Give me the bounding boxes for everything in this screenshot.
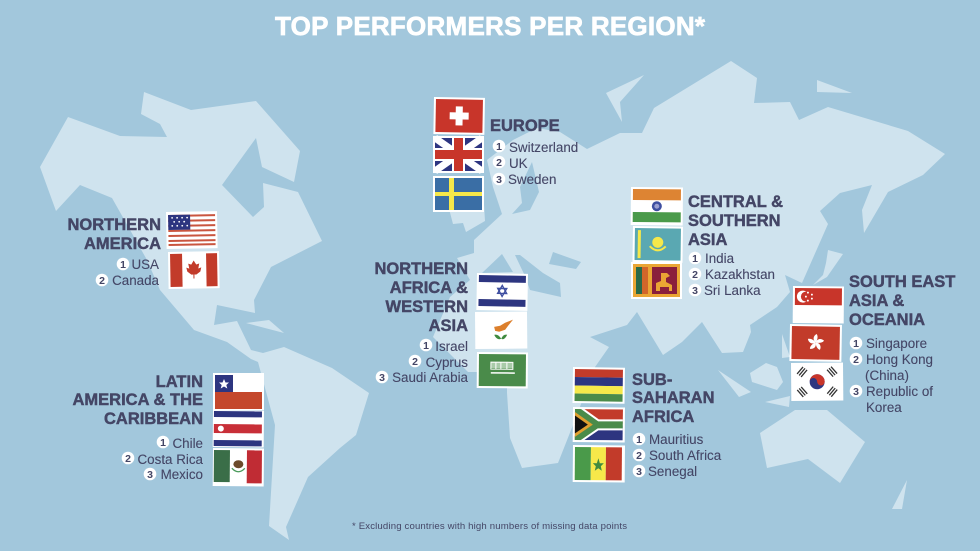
ranked list: Sub-Saharan Africa: Senegal bbox=[648, 464, 697, 479]
ranked list: Sub-Saharan Africa: 3 bbox=[636, 466, 642, 478]
heading: Latin America and the Caribbean: CARIBBEAN bbox=[104, 410, 203, 428]
ranked list: Latin America and the Caribbean: Mexico bbox=[161, 467, 203, 482]
flag: Kazakhstan bbox=[632, 226, 683, 263]
heading: South East Asia and Oceania: SOUTH EAST bbox=[849, 273, 955, 291]
ranked list: Latin America and the Caribbean: 1 bbox=[160, 437, 166, 449]
ranked list: Central and Southern Asia: 2 bbox=[692, 269, 698, 281]
heading: Northern America: AMERICA bbox=[84, 235, 161, 253]
ranked list: Europe: Switzerland bbox=[509, 140, 578, 155]
flag: Mauritius bbox=[572, 367, 625, 404]
ranked list: Latin America and the Caribbean: 3 bbox=[147, 469, 153, 481]
ranked list: Northern Africa and Western Asia: 3 bbox=[379, 372, 385, 384]
panel: South East Asia and Oceania bbox=[789, 273, 955, 415]
ranked list: South East Asia and Oceania: Singapore bbox=[866, 336, 927, 351]
ranked list: South East Asia and Oceania: Korea bbox=[866, 400, 902, 415]
ranked list: Central and Southern Asia: 1 bbox=[692, 253, 698, 265]
ranked list: Europe: UK bbox=[509, 156, 528, 171]
ranked list: Sub-Saharan Africa: Mauritius bbox=[649, 432, 704, 447]
ranked list: Central and Southern Asia bbox=[689, 251, 775, 298]
heading: Northern Africa and Western Asia: NORTHERN bbox=[374, 260, 468, 278]
ranked list: Northern Africa and Western Asia: 2 bbox=[412, 356, 418, 368]
flag: Senegal bbox=[573, 445, 625, 482]
heading: Sub-Saharan Africa: SAHARAN bbox=[632, 389, 714, 407]
ranked list: Europe: 1 bbox=[496, 141, 502, 153]
heading: Central and Southern Asia: CENTRAL & bbox=[688, 193, 783, 211]
ranked list: Sub-Saharan Africa: South Africa bbox=[649, 448, 722, 463]
flag: South Africa bbox=[573, 407, 625, 442]
heading: Northern Africa and Western Asia: AFRICA & bbox=[390, 279, 468, 297]
heading: Northern Africa and Western Asia: ASIA bbox=[429, 317, 468, 335]
title: TOP PERFORMERS PER REGION* bbox=[275, 11, 706, 41]
flag: Cyprus bbox=[475, 312, 527, 349]
ranked list: South East Asia and Oceania bbox=[850, 336, 933, 415]
ranked list: Latin America and the Caribbean: 2 bbox=[125, 453, 131, 465]
flag: Chile bbox=[213, 373, 264, 410]
ranked list: Sub-Saharan Africa bbox=[633, 432, 722, 479]
heading: Europe: EUROPE bbox=[490, 117, 560, 135]
ranked list: Europe: Sweden bbox=[508, 172, 556, 187]
ranked list: Northern Africa and Western Asia: Israel bbox=[435, 339, 468, 354]
ranked list: Central and Southern Asia: 3 bbox=[692, 285, 698, 297]
flag: USA bbox=[166, 211, 218, 249]
footnote: * Excluding countries with high numbers of missing data points bbox=[352, 521, 627, 532]
panel: Northern Africa and Western Asia bbox=[374, 260, 528, 388]
ranked list: South East Asia and Oceania: 2 bbox=[853, 354, 859, 366]
ranked list: Northern Africa and Western Asia bbox=[376, 339, 469, 385]
ranked list: Central and Southern Asia: Kazakhstan bbox=[705, 267, 775, 282]
panel: Europe bbox=[433, 97, 578, 212]
ranked list: Europe: 2 bbox=[496, 157, 502, 169]
ranked list: Latin America and the Caribbean bbox=[122, 436, 204, 482]
ranked list: Sub-Saharan Africa: 1 bbox=[636, 434, 642, 446]
heading: Latin America and the Caribbean: AMERICA & THE bbox=[73, 391, 203, 409]
heading: Northern Africa and Western Asia: WESTERN bbox=[386, 298, 468, 316]
heading: Northern America: NORTHERN bbox=[68, 216, 161, 234]
ranked list: Central and Southern Asia: Sri Lanka bbox=[704, 283, 761, 298]
ranked list: Latin America and the Caribbean: Chile bbox=[172, 436, 203, 451]
flag: UK bbox=[433, 136, 484, 173]
flag: India bbox=[631, 187, 683, 225]
ranked list: Northern Africa and Western Asia: Cyprus bbox=[426, 355, 468, 370]
flag: Sri Lanka bbox=[631, 262, 682, 299]
ranked list: South East Asia and Oceania: 1 bbox=[853, 338, 859, 350]
flag: Mexico bbox=[213, 448, 264, 486]
ranked list: South East Asia and Oceania: (China) bbox=[865, 368, 909, 383]
heading: South East Asia and Oceania: ASIA & bbox=[849, 292, 904, 310]
flag: Republic of Korea bbox=[791, 363, 843, 401]
ranked list: Northern Africa and Western Asia: 1 bbox=[423, 340, 429, 352]
panel: Northern America bbox=[68, 211, 220, 289]
heading: Central and Southern Asia: SOUTHERN bbox=[688, 212, 781, 230]
ranked list: Europe bbox=[493, 140, 578, 187]
ranked list: South East Asia and Oceania: Republic of bbox=[866, 384, 933, 399]
ranked list: Northern America bbox=[96, 257, 160, 288]
ranked list: Northern America: 2 bbox=[99, 275, 105, 287]
panel: Sub-Saharan Africa bbox=[572, 367, 722, 482]
ranked list: Northern America: Canada bbox=[112, 273, 160, 288]
heading: Latin America and the Caribbean: LATIN bbox=[156, 373, 203, 391]
ranked list: South East Asia and Oceania: 3 bbox=[853, 386, 859, 398]
heading: Central and Southern Asia: ASIA bbox=[688, 231, 728, 249]
ranked list: Europe: 3 bbox=[496, 174, 502, 186]
ranked list: Northern Africa and Western Asia: Saudi Arabia bbox=[392, 370, 469, 385]
flag: Canada bbox=[168, 251, 220, 289]
flag: Israel bbox=[476, 273, 528, 311]
flag: Hong Kong bbox=[789, 324, 842, 362]
ranked list: Latin America and the Caribbean: Costa Rica bbox=[138, 452, 204, 467]
ranked list: Northern America: USA bbox=[131, 257, 159, 272]
panel: Latin America and the Caribbean bbox=[73, 373, 264, 486]
flag: Saudi Arabia bbox=[477, 352, 528, 388]
heading: Sub-Saharan Africa: AFRICA bbox=[632, 408, 694, 426]
panel: Central and Southern Asia bbox=[631, 187, 783, 299]
flag: Costa Rica bbox=[213, 410, 264, 447]
ranked list: Northern America: 1 bbox=[120, 259, 126, 271]
heading: South East Asia and Oceania: OCEANIA bbox=[849, 311, 925, 329]
ranked list: Sub-Saharan Africa: 2 bbox=[636, 450, 642, 462]
flag: Switzerland bbox=[433, 97, 485, 135]
flag: Singapore bbox=[793, 286, 844, 323]
ranked list: South East Asia and Oceania: Hong Kong bbox=[866, 352, 933, 367]
heading: Sub-Saharan Africa: SUB- bbox=[632, 371, 672, 389]
flag: Sweden bbox=[433, 176, 484, 212]
ranked list: Central and Southern Asia: India bbox=[705, 251, 735, 266]
